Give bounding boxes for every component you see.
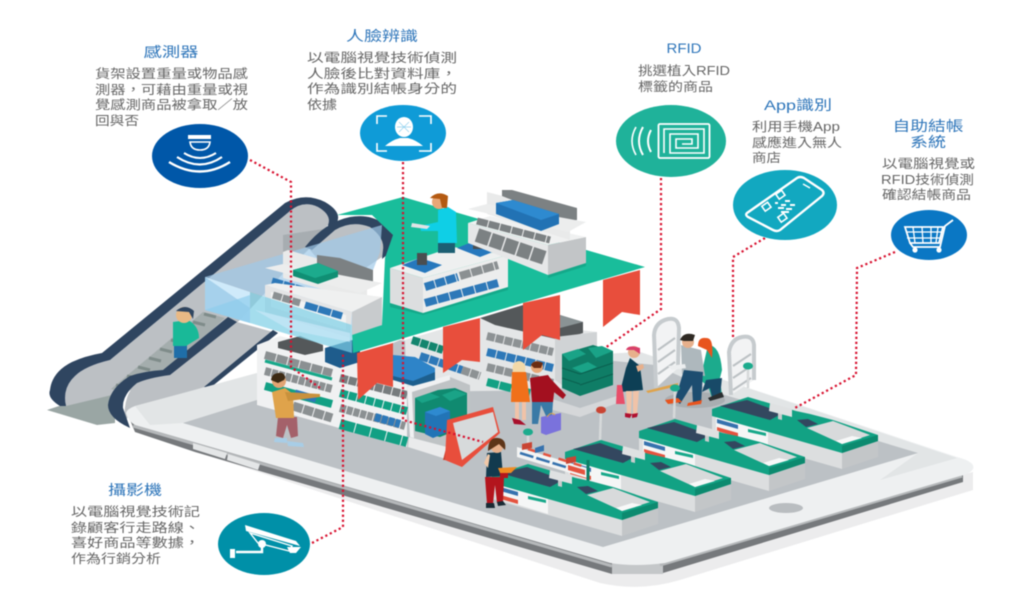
- text group: self checkout: [881, 118, 976, 202]
- text block: face recognition: 人臉後比對資料庫，: [307, 66, 457, 81]
- text block: face recognition: 以電腦視覺技術偵測: [307, 50, 457, 65]
- person on escalator: [173, 307, 199, 358]
- text block: face recognition: [307, 50, 457, 112]
- person with clipboard, upper floor: [411, 193, 457, 253]
- text block: App: 商店: [752, 150, 781, 165]
- text block: camera: 喜好商品等數據，: [71, 535, 200, 550]
- upper shelf B: [390, 238, 508, 313]
- text block: sensor: [95, 66, 249, 128]
- text group: camera: [71, 482, 200, 566]
- text group: face recognition: [307, 28, 457, 112]
- heading: RFID: RFID: [666, 40, 702, 56]
- red sign board: [443, 407, 500, 467]
- text block: self checkout: 以電腦視覺或: [882, 156, 976, 171]
- tablet: [126, 340, 973, 587]
- text block: RFID: 挑選植入RFID: [638, 63, 730, 78]
- checkout counter 4: [492, 464, 658, 536]
- icon: face recognition: [360, 105, 446, 161]
- text block: self checkout: 確認結帳商品: [882, 187, 971, 202]
- text group: sensor: [95, 44, 249, 128]
- upper shelf C: [468, 190, 586, 275]
- text block: sensor: 測器，可藉由重量或視: [95, 82, 249, 97]
- text block: camera: 以電腦視覺技術記: [71, 504, 200, 519]
- text block: face recognition: 依據: [307, 97, 338, 112]
- security gates: [646, 319, 754, 395]
- red dotted connector lines: [250, 160, 895, 543]
- shoppers: [511, 361, 566, 435]
- text block: App: 感應進入無人: [752, 135, 843, 150]
- text block: App: [752, 119, 843, 165]
- checkout counter 1: [712, 397, 878, 469]
- icon: sensor: [152, 124, 248, 188]
- glass camera cone front: [205, 277, 352, 353]
- icon: phone QR: [733, 170, 837, 240]
- upper shelf A: [265, 250, 382, 338]
- green box stack with base: [540, 345, 620, 417]
- text block: camera: 作為行銷分析: [71, 552, 161, 566]
- icon: shopping cart: [891, 210, 967, 260]
- woman in navy dress: [616, 346, 644, 418]
- icon: security camera: [218, 513, 310, 575]
- glass camera cone back: [205, 225, 382, 325]
- text block: sensor: 回與否: [95, 114, 139, 128]
- heading: self checkout: [892, 118, 964, 150]
- red banners: [357, 270, 640, 400]
- text block: sensor: 覺感測商品被拿取／放: [95, 97, 249, 112]
- text block: sensor: 貨架設置重量或物品感: [95, 66, 249, 81]
- heading: camera: 攝影機: [108, 482, 162, 498]
- sign posts: [523, 362, 753, 446]
- heading: self checkout: 系統: [910, 134, 946, 150]
- text block: face recognition: 作為識別結帳身分的: [307, 81, 457, 96]
- text group: RFID: [638, 40, 730, 94]
- person reaching shelf: [271, 373, 320, 447]
- upper floor: [337, 197, 645, 353]
- illustration: store on tablet: [47, 190, 973, 587]
- text block: camera: [71, 504, 200, 566]
- woman at counter: [484, 438, 517, 508]
- lower shelves: [257, 305, 597, 459]
- product rack: [517, 442, 588, 481]
- couple at gate: [665, 334, 725, 408]
- heading: face recognition: 人臉辨識: [346, 28, 418, 44]
- heading: self checkout: 自助結帳: [892, 118, 964, 134]
- icon: RFID: [616, 105, 726, 177]
- text block: camera: 錄顧客行走路線、: [71, 520, 200, 535]
- heading: App: App識別: [764, 97, 832, 113]
- heading: sensor: 感測器: [144, 44, 198, 60]
- text block: App: 利用手機App: [752, 119, 840, 134]
- text block: self checkout: [881, 156, 976, 202]
- text block: self checkout: RFID技術偵測: [881, 173, 974, 187]
- text block: RFID: [638, 63, 730, 94]
- checkout counter 2: [639, 419, 805, 491]
- text group: App: [752, 97, 843, 165]
- checkout counter 3: [565, 440, 731, 512]
- text block: RFID: 標籤的商品: [638, 79, 713, 94]
- escalators: [47, 197, 395, 428]
